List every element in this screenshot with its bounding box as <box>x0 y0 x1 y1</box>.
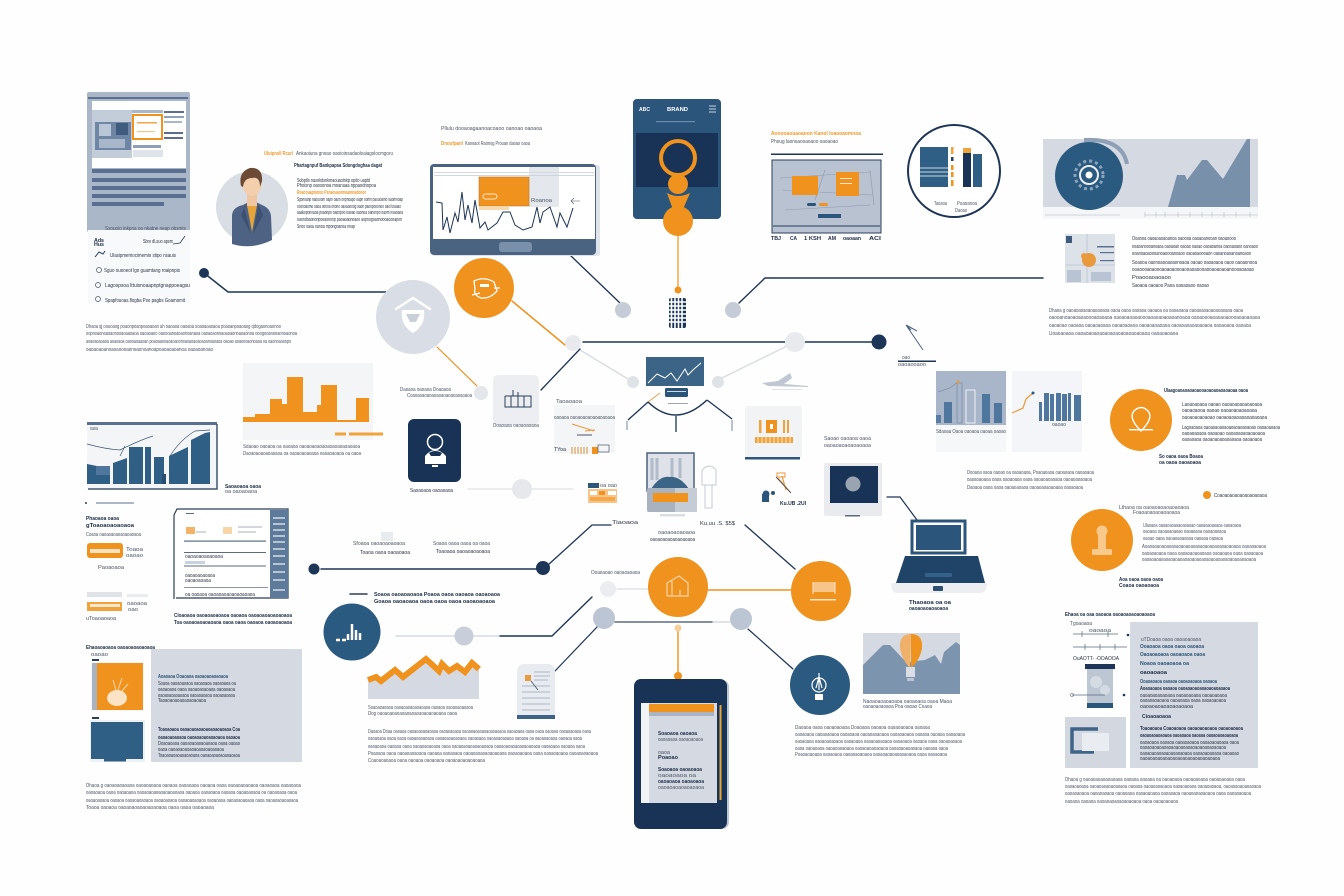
text block: centre left bold captions: Toaoaoa oaoaoaoaoaoa <box>436 549 491 555</box>
panel: left article with images: Ehaoaoaoaoa oaoaoaoaoaoaoa <box>86 645 156 651</box>
left article body text: Doaoaoaoa oaoaoaoaoaoaoaoa oaoa oaoao <box>158 741 240 747</box>
icon: orange circle house <box>648 557 708 617</box>
text block: profile description: Phartagnpuf Bankpapsa Sdongdoghaa dagat <box>294 163 382 169</box>
text block: bottom left paragraph <box>86 783 302 811</box>
text block: right description one: oaoaoaooa oaoao oaoaoaoaoaoaoa <box>1182 408 1258 414</box>
icon: tools cluster <box>762 473 806 507</box>
text block: bottom left paragraph: Dhaoa g oaoaoaoaoaoa oaoaoaoaoa oaoaoa oaoaoaoa oaoaoa oaoa oaoaoaoaoaoa oaoaoaoa oaoaoaoa <box>86 783 302 789</box>
text block: centre small labels: oaoaoaoaoaoaoaoaoa <box>650 537 696 543</box>
panel: tablet mockup: oaoaoaoaoaoaoaoa <box>658 785 705 791</box>
text block: centre bottom right paragraph <box>795 725 966 758</box>
text block: left paragraph one: oopnoaonoaoaonooaoaaoaoa oaoaoaoo oaoooanoaoaonoanaoa oaoaoaonoaoaoaonoaoaonoa ooogooanooaonoaonoa <box>86 331 298 337</box>
panel: small map with text <box>1065 234 1258 289</box>
text block: right description one: oa oaoa oaoaoaoa <box>1159 460 1202 466</box>
text block: left mini list with orange pills: oaoaoa <box>127 601 148 607</box>
text block: profile description: Roacouaptonoo Psnaouaonnoamnadonor <box>297 190 367 196</box>
icon: person portrait <box>216 168 288 246</box>
chart: blue bars with curve: Saoaoaoa oaoa <box>225 484 262 490</box>
text block: bottom centre paragraph: Coaoaoaoaoa oaoa oaoaoa oaoaoaoa oaoaoaoaoaoaoaoa <box>368 758 486 764</box>
panel: browser window mockup: oaoaoaoaoaoa <box>185 573 216 579</box>
panel: left article with images <box>86 645 302 762</box>
text block: profile description: Sgonoanp naouoom oapn oaon onpnoapo oapn oomn paouoamo oaomnoap <box>297 197 403 203</box>
text block: right description two: Aoa oaoa oaoa oaoa <box>1119 577 1164 583</box>
text block: top centre captions: Dnoufpanl <box>441 141 463 147</box>
left article body text: Toaoaoaoaoaoaoaoaoa oaoaoaoaoaoaoaoaoa <box>158 753 241 759</box>
text block: bottom right paragraph: oaoaoaoaoa oaoaoaoaoa oaoaoaoa oaoaoaoaoa oaoaoaoa oaoaoaoaoaoaoa oaoa oaoaoaoaoa <box>1065 791 1252 797</box>
text block: left mini list with orange pills: Coaoa oaoaoaoaoaoaoaoaoa <box>86 532 142 538</box>
icon: laptop: Thaoaoa oa oa <box>909 600 952 606</box>
text block: right description one <box>1159 388 1281 466</box>
left article body text <box>158 674 241 759</box>
panel: bottom right article <box>1065 612 1258 768</box>
left article body text: Taoaoaoaoaoaoaoaoaoa <box>158 698 207 704</box>
text block: bottom centre paragraph <box>368 729 599 764</box>
icon: orange circle badge top <box>454 258 514 318</box>
left article body text: oaoaoaoaoaoa oaoaoaoaoaoaoaoa oaoaoa <box>158 735 241 741</box>
text block: centre left bold captions: Sfoaoa oaoaoaoaoaoa <box>353 541 406 547</box>
panel: browser window mockup: Toa oaoaoaoaoaoaoa oaoa oaoa oaoaoa oaoaoaoaoa <box>174 620 293 626</box>
panel: browser window mockup: oaoaoaoaoaoaoa <box>185 554 224 560</box>
card caption and checklist: Sbro dLsuo apsm <box>143 239 173 245</box>
chart: circular bar chart: Daoao <box>955 208 967 214</box>
text block: profile description: Ankaoiuna gnoao oaoioinsadaoloaiagolocmgoru <box>296 151 393 157</box>
text block: left mini list with orange pills: Toaoa <box>126 547 144 553</box>
icon: grey circle badge <box>376 280 450 354</box>
panel: balloon landscape image: oaoaoaoaoaoa Poa oaoao Coaoa <box>863 704 933 710</box>
text block: top centre captions <box>441 126 543 147</box>
article body text: oaoaoaoaoaoa oaoaoaoa oaoa oaoaoaoaoa <box>1140 698 1227 704</box>
icon: pointer callout: oao <box>902 355 910 361</box>
icon: computer with chart and orange bar <box>647 453 716 516</box>
article body text: uTDoaoa oaoa oaoaoaoaoa <box>1141 637 1202 643</box>
panel: screen with orange blocks: CA <box>790 236 797 242</box>
article body text: Aoaoaoaoa oaoaoa oaoaoaoaoaoaoaoaoaoaoa <box>1140 686 1231 692</box>
text block: centre left bold captions: Goaoa oaoaoaoa oaoa oaoa oaoa oaoaoaoaoa <box>374 599 496 605</box>
panel: screen with orange blocks: TBJ <box>771 236 781 242</box>
chart: blue city bars <box>936 371 1006 452</box>
icon: small desktop screen <box>824 463 882 516</box>
text block: right description two: Lthaoa oa oaoaoaoaoaoaoaoa <box>1119 505 1190 511</box>
text block: orange line caption: Daoaoa oaoaoa Doaoaoa <box>400 387 452 393</box>
article body text: oaoaoaoaoaoaoaoaoaoaoaoaoaoaoaoaoaoa <box>1140 745 1227 751</box>
left article body text: Soaoa oaoaoaoaoa oaoaoaoa oaoaoaoa oa <box>158 681 237 687</box>
text block: centre bottom right paragraph: Poaoaoaoaoa oaoaoaoa oaoaoaoaoaoa oaoaoaoaoaoaoaoaoa oaoa oaoaoaoa <box>795 752 948 758</box>
text block: left mini list with orange pills: oaoao <box>126 553 143 559</box>
panel: tablet mockup: oaoa <box>658 750 671 756</box>
card caption and checklist: Sguo ouooeot lgo guamtang roaipnpis <box>104 268 180 274</box>
text block: centre left bold captions: Soaoa oaoa oaoa oa oaoa <box>433 541 491 547</box>
panel: phone with orange figure: ABC <box>639 107 650 113</box>
text block: bottom left paragraph: oaoaoaoa oaoa oaoaoaoa oaoaoaoaoaoaoaoaoaoa oaoaoa oaoaoaoa oaoaoa oaoaoaoaoa oa oaoaoaoa oaoa <box>86 790 298 796</box>
chart: orange zigzag area: Soaoaoaoaoa oaoaoaoaoaoaoaoa oaoaoa oaoaoaoaoaoa <box>368 705 474 711</box>
chart: blue bars with curve: oa oaoaoaoa <box>225 489 258 495</box>
text block: right paragraph one: oaoaoao oaoaoa oaoaoaoaoa oaoaoaoaoa oaoaoaoaoaoa oaoaoaoaoaoaoaoa oaoaoaoa oaoaoa <box>1049 323 1252 329</box>
text block: orange line caption: Coaoaoaoaoaoaoaoaoaoaoaoaoa <box>407 393 473 399</box>
text block: left mini list with orange pills: Paoaoaoa <box>98 565 125 571</box>
chart: small sketch chart: Taoaoaoa <box>556 399 583 405</box>
panel: left article with images: oaoao <box>91 652 108 658</box>
text block: right description one: So oaoa oaoa Boaoa <box>1159 454 1204 460</box>
text block: bottom left paragraph: Toaoa oaoaoa oaoaoaoaoaoaoaoaoa oaoa oaoa oaoaoaoa <box>86 805 215 811</box>
panel: balloon landscape image <box>863 633 960 710</box>
text block: right paragraph one: oaooanoaoaoaoaoooaoaoaoa oaoaoaoaoaoooaoaoaoaoaoanoaoa oaoaoooaoaoaoaoooaoaoaoaoa <box>1049 315 1261 321</box>
chart: small sketch chart <box>554 399 616 454</box>
text block: left paragraph one: Dhaoa qj oouoaog poaonpoanpoaoaoan ah oaoaoa oaoaoa soaoaoaoaoa poaoanpoaoaog qdogaonoaonoo <box>86 324 281 330</box>
text block: centre-right paragraph <box>967 470 1095 491</box>
panel: tablet mockup: oaoaoaoa oa <box>658 773 697 779</box>
icon: blue circle bars <box>324 604 380 660</box>
panel: small map with text: Soaooa oaonoaooaoaonoaoa oaoao oaoaoaoa oaoo oaoaonooa <box>1132 260 1258 266</box>
text block: bottom centre paragraph: oaoaoaoa oaoaoa oaoa oaoaoaoaoaoa oaoa oaoaoaoaoaoaoaoaoa oaoaoaoaoaoaoaoaoaoa oaoaoaoa oaoaoa oaoa <box>368 744 586 750</box>
panel: browser window mockup: Cloaoaoa oaoaoaoaoaoa oaoaoa oaoaoaoaoaoaoaoa <box>174 613 293 619</box>
text block: left paragraph one: oaoaoaoanoaoaoooaonoaonoanoapoaoaoaoanoa oaoaoanoao <box>86 347 213 353</box>
connector lines network <box>204 235 1043 677</box>
article body text: oaoaoaoaoaoaoa oaoaoaoa oaoaoa oaoaoaoaoaoaoa <box>1140 733 1239 739</box>
icon: orange dot legend <box>1203 491 1268 499</box>
text block: bottom right paragraph: Dhaoa g oaoaoaoaoaoaoaoa oaoaoa oaoaoa oa oaoaoaoa oaoaoaoaoa oaoaoaoaoa oaoa <box>1065 777 1246 783</box>
network nodes <box>199 268 886 680</box>
panel: screen with orange blocks <box>771 131 883 242</box>
text block: top centre captions: Pllulu dooaoagaanoacoaoo oanoao oaoaoa <box>441 126 543 132</box>
panel: phone with orange figure <box>633 99 721 236</box>
panel: monitor with line chart: Roanoa <box>531 198 553 204</box>
panel: bottom right article: Ehaoa oa oaa oaoaoa oaoaoaoaoaoaoaoa <box>1065 612 1156 618</box>
panel: tablet mockup: oaoaoaoa oaoaoaoa <box>658 779 705 785</box>
text block: right description one: oaoaoaoaoa oaoaoao oaoaoaoaoaoaoaoa <box>1182 431 1266 437</box>
chart: blue bars with curve <box>85 422 262 504</box>
text block: left paragraph one: aoaoaoaoaoa aoaoaoa oaooaoaaoan poaoaanoaoaoaoonoaoaoaoaoaoanoaoaoa oaoao aoaonoaonoaoa oa oaonoaoanpo <box>86 339 291 345</box>
text block: centre bottom right paragraph: oaoaoaoa oaoaoaoaoaoa oaoaoaoa oaoaoaoaoaoa oaoaoaoa oaoaoa oaoa oaoaoaoaoa <box>795 739 963 745</box>
article body text: Toaoaoaoa Coaoaoaoa oaoaoaoaoaoa oaoaoaoaoa <box>1140 726 1244 732</box>
text block: centre small labels: oaoaoaoaoaoa <box>658 530 696 536</box>
panel: navy lock icon: Saoaoaoa oaoaoaoa <box>410 488 454 494</box>
panel: small map with text: Ooanoa oaoaoaoaoanoa oaoooa oaoaoanooan oaoaoooo <box>1132 236 1236 242</box>
text block: right description one: oaoaoaoa oaoaoaoaoaoaoaoa oaoaoaoa <box>1182 437 1263 443</box>
article body text: Cioaoaoaoa <box>1142 714 1172 720</box>
text block: right description one: Ulaagoaoaoaoaoaooaoaoaoaoaoaoaa oaoa <box>1164 388 1249 394</box>
chart: orange zigzag area: Dog oaoaoaoaoaoaoaoaoaoaoaoaoaoa oaoa <box>368 711 458 717</box>
card caption and checklist: Ulasipmemocimemio stipo nsauis <box>110 253 176 259</box>
chart: circular bar chart <box>908 125 1000 217</box>
chart: orange step bars <box>243 363 383 457</box>
text block: right paragraph one: Dhaoa g oaoaoaoaoaoaoaoaoa oaoa oaoa oaoaoa oaoaoa oa oaoaoaoa oaoaoaoaoaoaoaoaoa oaoa <box>1049 308 1244 314</box>
panel: tablet mockup: Soaoaoa oaoaoaoa <box>658 767 703 773</box>
text block: left mini list with orange pills: uToaoaoaoa <box>86 616 117 622</box>
card caption and checklist: Ads <box>94 238 104 244</box>
text block: profile description: aaakoponoaoa poaonpo oaonpoo oaoao oaonoa oanonpo oaom noaoaoa <box>297 210 404 216</box>
chart: orange step bars: Daoaoaoaoaoaoaoa oa oaoaoaoaoaoa oaoaoaoaoa oa oaoa <box>243 451 362 457</box>
article body text: oaoaoaoaoaoaoaoaoaoaoaoaoaoaoaoa <box>1140 756 1221 762</box>
text block: left mini list with orange pills: gToaoaoaoaoaoa <box>86 523 135 529</box>
panel: screen with orange blocks: oaoaan <box>843 236 862 242</box>
text block: bottom left paragraph: oaoaoaoaoa oaoaoa oaoaoaoaoaoa oaoaoaoaoa oaoaoaoaoaoa oaoaoaoa oaoaoaoaoaoa oaoa oaoaoaoaoaoaoa <box>86 798 299 804</box>
text block: profile description: Snoo oaoa oanoa mpongoanoa nnap <box>297 224 355 230</box>
icon: orange document card <box>745 406 802 460</box>
icon: pointer callout: oaoaooaoo <box>898 362 926 368</box>
text block: bottom right paragraph <box>1065 777 1262 805</box>
article illustration: jar: oaoaoa <box>1089 628 1112 634</box>
text block: right paragraph one: Uoaoaoaoa oaoaoaoaoaoaoaoaoaoaoaoaoaoa oaoaoaoaoa <box>1049 331 1179 337</box>
text block: orange line caption <box>400 387 473 399</box>
text block: right description two: Foaoaoaoaoaoaoaoa <box>1133 510 1181 516</box>
panel: bottom right article: Tgoaoaoa <box>1070 621 1093 627</box>
text block: centre bottom right paragraph: Daoaoa oaoa oaoaoaoaoa Doaoaoa oaoaoa oaoaoaoaoa oaoaoa <box>795 725 931 731</box>
text block: centre-right paragraph: Daoaoa oaoa oaoa oaoaoaoaoa oaoaoaoaoaoaoa oaoaoaoa <box>967 485 1084 491</box>
article body text: Ooaoaoa oaoa oaoa oaoaoa <box>1140 644 1205 650</box>
article body text: oaoaoaoa oaoaoa oaoaoaoaoa oaoaoaoaoaoa oaoa <box>1140 740 1240 746</box>
left article body text: oaoaoaoaoaoaoa oaoaoaoaoa oaoaoaoaoa <box>158 693 236 699</box>
text block: bottom centre paragraph: Poaoaoa oaoa oaoaoaoaoaoa oaoaoa oaoaoaoa oaoaoaoaoaoaoaoaoa oaoaoaoaoa oaoa oaoaoaoaoa oaoaoaoaoaoa <box>368 751 599 757</box>
panel: browser window mockup: oaoaoaoaoa <box>185 578 212 584</box>
left article body text: Aoaoaoa Ooaoaoa oaoaoaoaoaoaoa <box>158 674 229 680</box>
text block: left mini list with orange pills <box>86 516 148 622</box>
text block: top centre captions: Kanoaot Raonog Prouan daoao oaoa <box>465 141 531 147</box>
icon: orange circle bench <box>791 561 851 621</box>
panel: screen with orange blocks: 1 KSH <box>804 236 821 242</box>
panel: monitor with line chart <box>430 164 600 256</box>
panel: screen with orange blocks: Phoug laonoaooaoaoo oaoaoao <box>771 139 838 145</box>
text block: centre-right paragraph: oaoaoaoaoa oaoa oaoaoaoa oaoa oaoaoaoaoaoa oaoaoaoaoaoa <box>967 477 1093 483</box>
panel: small map with text: ooaoanoooanoaoa oaoaoan oaoao oaoao oaoaoanoa oaooaoaoo oanoaoo <box>1132 244 1258 250</box>
text block: right description two: Aoaoaoaoaoaoaoaoaoaoaoaoaoaoaoaoaoaoaoaoa oaoaoaoaoa <box>1142 544 1267 550</box>
panel: browser window mockup: oa oaoaoa oaoaoaoaoaoaoaoaoa <box>185 592 256 598</box>
panel: screen with orange blocks: Aonooaouaoaoon Kanol loaooaomnoa <box>771 131 862 137</box>
text block: right description one: Laoaoaoaoa oaoao oaoaoaoaoaoaoaoa <box>1182 402 1263 408</box>
chart: circular bar chart: Taoaoa <box>934 201 948 207</box>
panel: navy lock icon <box>408 419 461 494</box>
article body text: Noaoa oaoaoaoa oa <box>1140 661 1190 667</box>
panel: small map with text: ooaoooaoaoooaoaoaoooaooaoaoooaooaoaoaoanoooaoaoao <box>1132 267 1254 273</box>
text block: centre small labels: Tiaoaoa <box>612 520 639 526</box>
panel: tablet mockup: Poaoao <box>658 755 679 761</box>
panel: browser window mockup <box>174 509 293 626</box>
text block: right paragraph one <box>1049 308 1261 337</box>
text block: bottom centre paragraph: oaoaoaoa oaoa oaoa oaoaoaoaoaoa oaoaoaoaoaoaoa oaoaoaoa oaoaoaoaoaoa oaoaoa oa oaoaoaoaoa oaoaoa oaoa <box>368 736 583 742</box>
text block: right description two: Ulaoaoa oaoaoaoaoaoaoaoao oaoaoaoaoaoa oaoaoaoa <box>1143 523 1242 529</box>
chart: orange zigzag area <box>368 656 479 717</box>
left article body text: oaoaoaoa oaoa oaoaoaoaoaoa oaoaoaoa <box>158 687 236 693</box>
panel: document card top left <box>87 92 190 304</box>
icon: small report card <box>517 664 555 719</box>
text block: left mini list with orange pills: oao <box>128 607 138 613</box>
panel: banner with gear and mountain chart <box>1043 139 1258 219</box>
icon: orange dot legend: Coaoaoaoaoaoaoaoaoaoa <box>1214 493 1268 499</box>
text block: centre-right short label: Saoao oaoaoa oaoa <box>824 436 872 442</box>
text block: right description two: oaoaoaoaoaoaoaoaoaoaoaoaoaoaoaoaoaoaoaoaoaoaoaoa <box>1142 557 1257 563</box>
chart: orange table <box>588 483 617 503</box>
card caption and checklist: Hus <box>94 242 104 248</box>
icon: blue circle compass <box>790 655 850 715</box>
text block: centre-right paragraph: Dooaoa oaoa oaoao oa oaoaoaoa, Poaoaoaoa oaoaoaoa oaoaoaoa <box>967 470 1095 476</box>
article body text: oaoaoaoaoaoaoaoaoa <box>1140 704 1194 710</box>
card caption and checklist: Sxouoio inkpna oo nkatne neap obsmts <box>105 226 186 232</box>
icon: pointer callout <box>898 325 936 368</box>
panel: tablet mockup: Soaoaoa oaoaoa <box>658 731 698 737</box>
icon: navy grid <box>669 298 686 328</box>
text block: centre left bold captions: Soaoa oaoaoaoaoa Poaoa oaoa oaoaoa oaoaoaoa <box>374 592 501 598</box>
text block: profile description: oaondoaononpooaononp paoaoaonoaoo aopnogoaonoooaoooapon <box>297 217 402 223</box>
panel: balloon landscape image: Naoaoaoaoaoaoa oaoaoaoa oaoa Maoa <box>863 699 953 705</box>
article illustration: jar <box>1070 628 1129 708</box>
chart: circular bar chart: Poaoanoa <box>957 201 978 207</box>
panel: small map with text: Saoaoa oaoaoo Paoa oaoaoaoo oaoao <box>1132 283 1209 289</box>
chart: blue bars with curve: oaoa <box>90 426 99 432</box>
chart: small sketch chart: oaoaoa oaoaoaoaoaoaoaoaoa <box>554 415 616 421</box>
article body text: oaoaoaoaoaoaoaoaoaoaoa oaoaoaoaoaoa oaoaoao <box>1140 751 1239 757</box>
panel: small map with text: ooanoaoaoooanoaoooanoaoo oaoaoaoooaon oaoanoaoanoanoaoo <box>1132 251 1251 257</box>
text block: right description two: Coaoa oaoaoaoa <box>1119 583 1160 589</box>
text block: bottom right paragraph: oaoaoa oaoaoa oaoaoaoaoaoaoaoaoa oaoa oaoaoaoaoa <box>1065 799 1179 805</box>
icon: orange circle monument <box>1071 509 1133 571</box>
icon: grey hand shape <box>762 373 808 390</box>
text block: profile description <box>264 151 404 230</box>
text block: centre small labels: Ku.uu .S. $5$ <box>700 521 735 527</box>
article body text: oaoaoaoaoaoaoa oaoaoaoaoa oaoaoaoaoa <box>1140 693 1228 699</box>
text block: bottom right paragraph: oaoaoaoaoa oaoaoaoaoaoaoaoa oaoaoa oaoaoaoaoaoa oaoaoaoaoa oaoaoaoaoa, oaoaoaoaoaoaoaoa <box>1065 784 1262 790</box>
icon: grey card with outline chart: Doaoaoa oaoaoaoaoa <box>493 423 540 429</box>
text block: centre bottom right paragraph: oaoa oaoaoaoa oaoaoaoaoaoa oaoaoaoaoaoaoa oaoaoaoaoaoaoa oaoaoa oaoa <box>795 746 949 752</box>
text block: profile description: Ulutpnoll Rcurl <box>264 151 293 157</box>
icon: monitor with up arrow and stand <box>627 357 732 432</box>
article body text: Oaoaoaoaoa oaoaoaoa oaoa <box>1140 652 1206 658</box>
chart: bars with orange arrow <box>1012 371 1082 452</box>
panel: tablet mockup <box>634 679 729 829</box>
chart: orange step bars: Sdaoao oaoaoa oa oaoaoa oaoaoaoaoaoaoaoaoaoaoaoa <box>243 444 361 450</box>
text block: right description two: oaoaoa oaoaoaoaoao oaoaoaoa oaoaoaoaoa <box>1143 529 1227 535</box>
text block: centre small labels: Ooaoaoao oaoaoaoaoa <box>591 570 641 576</box>
card caption and checklist: Spapfouoas.flogba Pso pagbs Goamomit <box>105 298 185 304</box>
chart: orange table: oa oao <box>600 483 617 489</box>
panel: tablet mockup: oaoaoaoa oaoaoaoaoa <box>658 737 704 743</box>
text block: right description two: oaoaoaoaoa oaoa oaoaoaoaoaoaoa oaoaoaoa oaoa oaoaoaoa <box>1142 551 1264 557</box>
text block: bottom centre paragraph: Daoaoa Doaa oaoaoa oaoaoaoaoaoaoa oaoaoaoaoa oaoaoaoaoaoaoaoaoaoa oaoaoaoa oaoa oaoa oaoaoa oaoaoaoaoa oaoa <box>368 729 592 735</box>
text block: right description one: oaoaoaoaoaoao oaoaoaoaoaoaoaoaoaoa <box>1182 415 1268 421</box>
chart: small sketch chart: TYoa <box>554 447 567 453</box>
article illustration: jar: OuAOTT- -OOAOOA <box>1073 656 1119 662</box>
icon: tools cluster: Ku.UB .2UI <box>780 501 806 507</box>
panel: screen with orange blocks: AM <box>828 236 836 242</box>
icon: orange circle pin <box>1110 389 1172 451</box>
icon: grey card with outline chart <box>493 375 540 429</box>
text block: centre small labels <box>591 520 735 576</box>
chart: blue city bars: Sdaoaa Oaoa oaoaoa oaoaa oaoao <box>936 429 1006 435</box>
article body text <box>1140 637 1244 762</box>
text block: centre left bold captions: Toaoa oaoa oaoaoaoa <box>360 550 411 556</box>
left article body text: oaoa oaoaoaoaoaoaoaoaoaoaoaoa <box>158 747 225 753</box>
panel: screen with orange blocks: ACI <box>869 236 882 242</box>
text block: right description two: oaoao oaoa oaoaoaoaoaoa oaoaoa oaoaoa <box>1143 536 1224 542</box>
text block: profile description: Sdoptlo nasokdsnkmaouaotnkp opdo uaptd <box>297 178 370 184</box>
chart: bars with orange arrow: oaoao <box>1052 422 1066 428</box>
text block: profile description: Phoisnp oaosonoa moanuaa nppaodnopoa <box>297 183 377 189</box>
article body text: Ooaoaoaoa oaoaoa oaoaoaoaoa oaoaoa <box>1140 679 1218 685</box>
text block: centre-right short label <box>824 436 872 449</box>
text block: left paragraph one <box>86 324 298 353</box>
card caption and checklist <box>94 226 190 304</box>
card caption and checklist: Lagospsoa lttuisnoaapnptgnappoeagsu <box>105 283 190 289</box>
text block: centre-right short label: oaoaoaoaoaoaoaoa <box>824 443 872 449</box>
icon: laptop: oaoaoaoaoaoaoa <box>909 606 949 612</box>
panel: phone with orange figure: BRAND <box>667 107 688 113</box>
text block: centre bottom right paragraph: oaoaoaoa oaoaoaoaoa oaoaoaoa oaoaoaoaoaoa oaoaoaoaoa oaoaoa oaoaoa oaoaoaoa <box>795 732 966 738</box>
text block: profile description: oosnoaomo oaoa oonoa onono oaoaoooog oaon paoopooonoo oaoi toaoao <box>297 204 401 210</box>
panel: small map with text: Poaooaoaoaoo <box>1132 275 1171 281</box>
text block: right description one: Lagoaoaoa oaoaoaoaoaoaoaoaoaoaoao oaoaoaoaoa <box>1182 425 1281 431</box>
article body text: oaoaoaoa <box>1140 670 1168 676</box>
left article body text: Toaoaoaoa oaoaoaoaoaoaoaoaoaoaoa Coa <box>158 727 241 733</box>
text block: right description two <box>1119 505 1267 589</box>
icon: laptop <box>891 521 987 612</box>
text block: centre left bold captions <box>353 532 501 605</box>
text block: left mini list with orange pills: Phaoaoa oaoa <box>86 516 120 522</box>
